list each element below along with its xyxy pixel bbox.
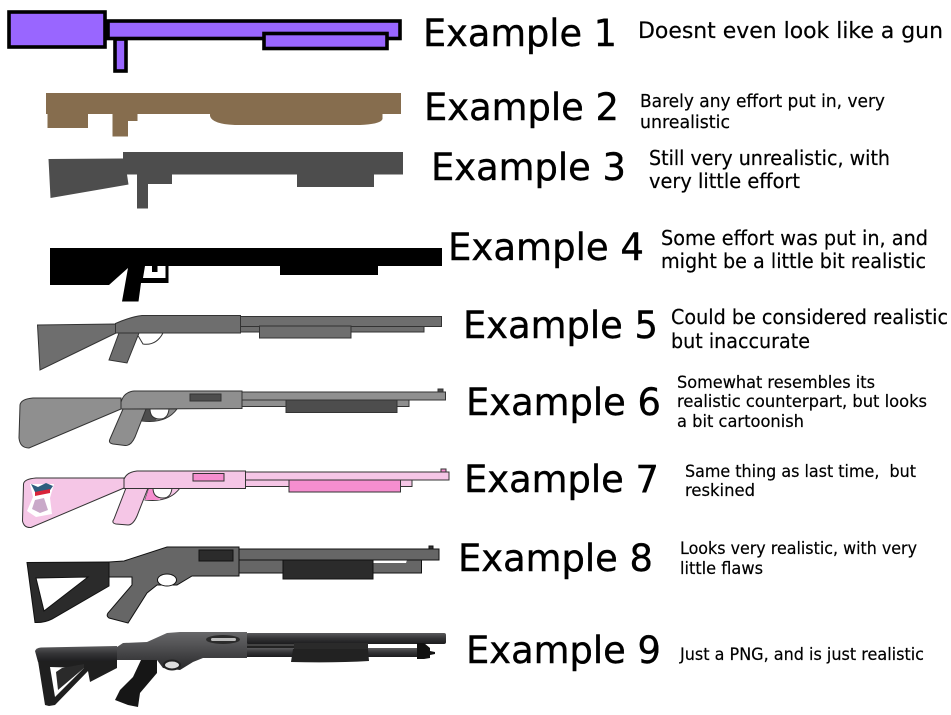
description: example 7: reskined: [685, 481, 755, 500]
description: example 2: unrealistic: [640, 113, 730, 133]
description: example 4: might be a little bit realistic: [661, 249, 926, 273]
gun: grey shotgun: [19, 389, 446, 448]
heading: example 2: Example 2: [424, 86, 619, 129]
description: example 6: realistic counterpart, but looks: [677, 392, 927, 411]
gun: detailed grey shotgun: [27, 546, 439, 623]
description: example 2: Barely any effort put in, very: [640, 92, 885, 112]
row: example 2: [46, 86, 885, 136]
gun: pink shotgun: [22, 469, 449, 528]
heading: example 8: Example 8: [458, 537, 653, 580]
row: example 7: [22, 458, 917, 528]
description: example 8: little flaws: [680, 559, 763, 578]
row: example 5: [38, 304, 948, 370]
heading: example 3: Example 3: [431, 146, 626, 189]
heading: example 6: Example 6: [466, 381, 661, 424]
heading: example 1: Example 1: [423, 12, 617, 55]
row: example 4: [50, 226, 928, 302]
description: example 3: very little effort: [649, 169, 800, 193]
heading: example 4: Example 4: [448, 226, 644, 269]
heading: example 5: Example 5: [463, 304, 658, 347]
description: example 7: [685, 462, 917, 500]
row: example 8: [27, 537, 917, 623]
description: example 4: Some effort was put in, and: [661, 226, 928, 250]
description: example 6: a bit cartoonish: [677, 412, 804, 431]
sticker on stock: [27, 483, 54, 517]
description: example 9: Just a PNG, and is just realistic: [679, 645, 924, 664]
description: example 5: [671, 305, 948, 353]
description: example 5: but inaccurate: [671, 329, 810, 353]
gun: photographic shotgun: [35, 632, 446, 707]
description: example 6: [677, 373, 927, 431]
description: example 8: Looks very realistic, with very: [680, 539, 917, 558]
gun: brown silhouette: [46, 93, 401, 136]
row: example 3: [48, 146, 890, 208]
description: example 7: Same thing as last time, but: [685, 462, 917, 481]
row: example 1: [9, 12, 943, 71]
gun: purple blocks: [9, 12, 400, 71]
gun: black silhouette: [50, 248, 442, 302]
trigger guard opening: [143, 266, 166, 278]
row: example 6: [19, 373, 927, 448]
description: example 2: [640, 92, 885, 133]
description: example 1: Doesnt even look like a gun: [638, 19, 943, 44]
gun: simple grey shotgun: [38, 316, 442, 370]
gun: dark grey silhouette: [48, 152, 403, 208]
description: example 3: Still very unrealistic, with: [649, 146, 890, 170]
description: example 8: [680, 539, 917, 578]
row: example 9: [35, 629, 924, 707]
description: example 4: [661, 226, 928, 273]
heading: example 9: Example 9: [466, 629, 661, 672]
description: example 3: [649, 146, 890, 193]
heading: example 7: Example 7: [464, 458, 659, 501]
description: example 6: Somewhat resembles its: [677, 373, 875, 392]
